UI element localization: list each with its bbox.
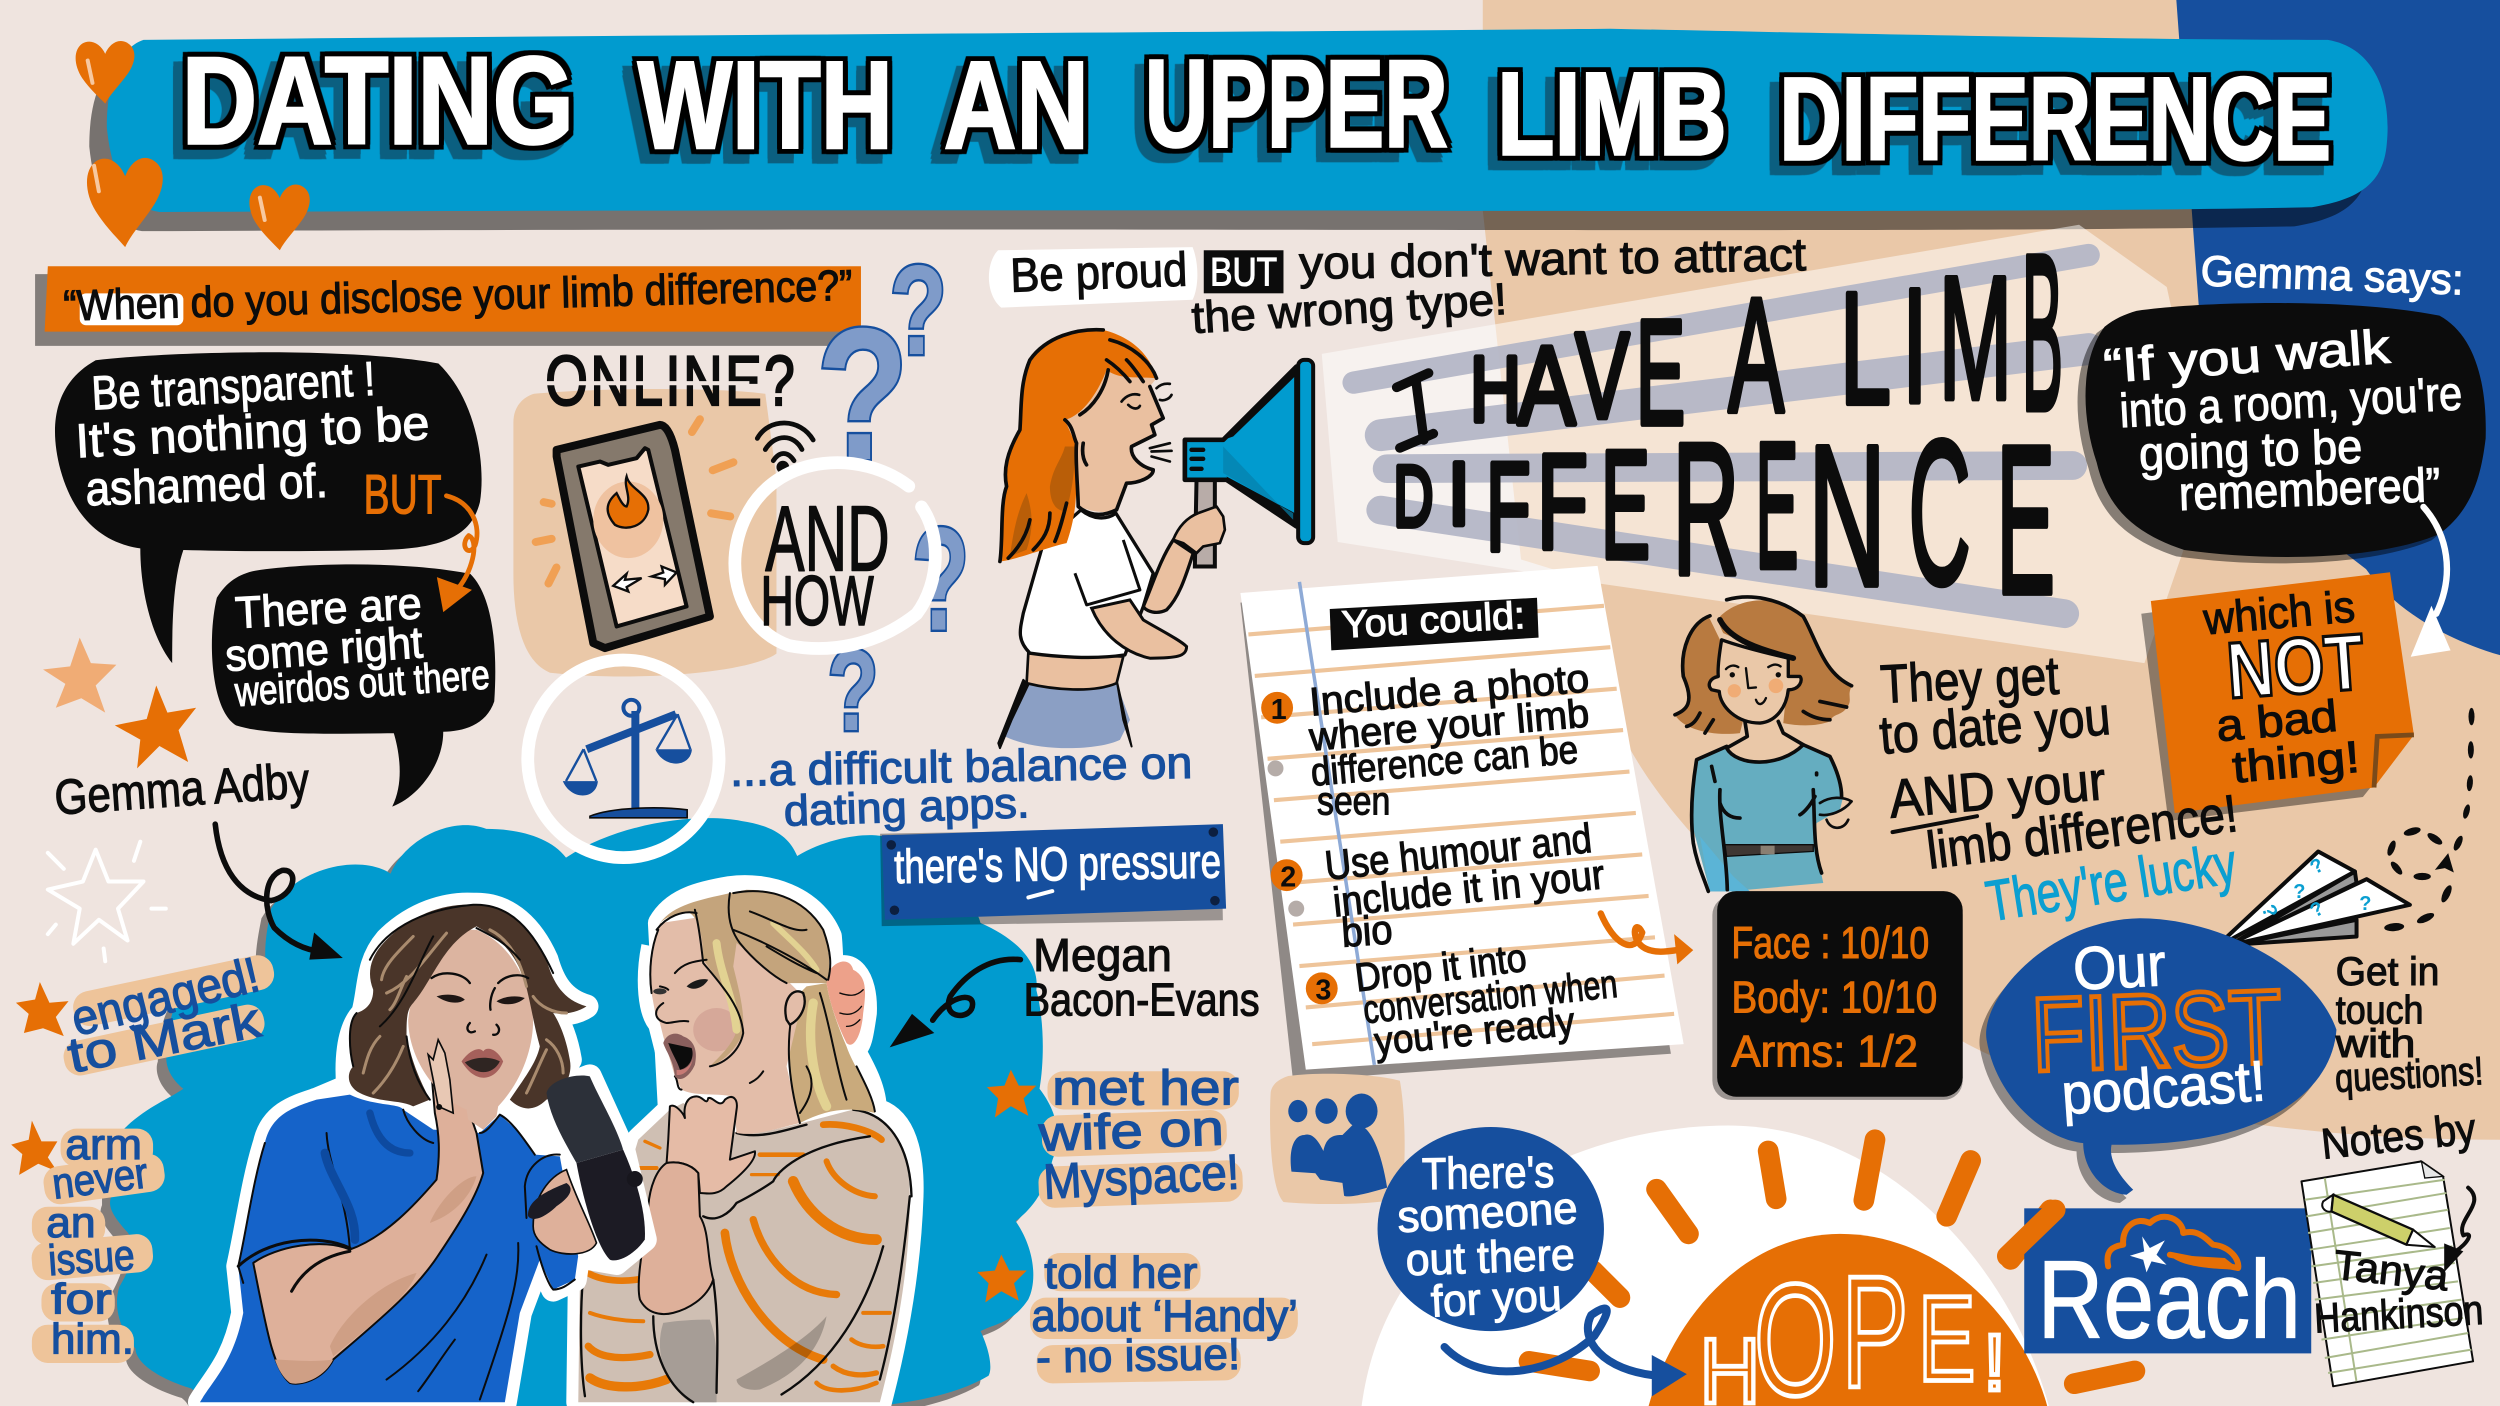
heading: I have a limb bbox=[1397, 209, 2063, 458]
speech bubble: our first podcast: Our bbox=[2071, 930, 2167, 1003]
heading: I have a limb: E bbox=[1636, 288, 1685, 456]
text: be proud bbox=[989, 228, 1807, 343]
list item 3: 3 bbox=[1315, 975, 1331, 1007]
icon: microphone bbox=[546, 1076, 645, 1260]
heading: difference: E bbox=[1601, 418, 1650, 591]
list item 3: conversation when bbox=[1361, 962, 1619, 1032]
circle: someone out there: There's bbox=[1422, 1148, 1555, 1199]
icon: hearts bbox=[76, 41, 310, 250]
hair bbox=[349, 905, 586, 1108]
ear bbox=[785, 991, 805, 1025]
label: Megan Bacon-Evans bbox=[1024, 929, 1260, 1025]
body bbox=[998, 510, 1193, 748]
text: be proud: Be proud bbox=[1009, 244, 1188, 303]
heading: difference: I bbox=[1448, 443, 1470, 543]
heading: I have a limb: L bbox=[1840, 259, 1891, 437]
dress bbox=[1692, 745, 1843, 891]
title: LIMB bbox=[1497, 48, 1727, 180]
arrow: to notepad bbox=[2444, 1188, 2474, 1272]
list item 1 bbox=[1261, 656, 1591, 824]
title: WITH bbox=[638, 36, 893, 175]
dashed flight trail bbox=[2384, 708, 2475, 932]
arrow: white arrow bbox=[2411, 507, 2451, 657]
text: get in touch: Get in bbox=[2336, 950, 2439, 994]
right hair bbox=[789, 983, 875, 1123]
speech bubble: Gemma says: going to be bbox=[2138, 421, 2363, 481]
facial features bbox=[432, 973, 528, 1035]
note: not a bad thing bbox=[2141, 572, 2414, 821]
speech bubble: be transparent: ashamed of. bbox=[85, 455, 329, 516]
heading: I have a limb: A bbox=[1728, 265, 1784, 446]
note: not a bad thing: which is bbox=[2201, 582, 2357, 644]
text: get in touch bbox=[2334, 950, 2484, 1101]
speech bubble: our first podcast bbox=[1979, 918, 2336, 1203]
note: not a bad thing: a bad bbox=[2214, 692, 2339, 751]
handle bbox=[1195, 480, 1215, 566]
icon: wifi bbox=[757, 423, 813, 471]
text: they get to date you bbox=[1877, 646, 2241, 881]
speech bubble: be transparent bbox=[55, 352, 482, 663]
megaphone bbox=[1185, 367, 1296, 526]
list: Gemma facts: to Mark bbox=[63, 992, 265, 1084]
circle: someone out there: out there bbox=[1405, 1230, 1576, 1285]
list item 3 bbox=[1306, 936, 1619, 1064]
head and megaphone bbox=[1000, 329, 1313, 566]
note: not a bad thing: thing! bbox=[2230, 733, 2362, 793]
list: Megan facts: met her bbox=[1052, 1061, 1239, 1116]
speech bubble: our first podcast: FIRST bbox=[2030, 969, 2284, 1094]
list item 1: 1 bbox=[1271, 694, 1287, 726]
icon: stars left bbox=[43, 638, 196, 768]
text: difficult balance: dating apps. bbox=[783, 779, 1030, 836]
heading: difference: F bbox=[1486, 436, 1531, 577]
panel: ratings: Body: 10/10 bbox=[1732, 973, 1937, 1022]
speech bubble: be transparent: BUT bbox=[364, 462, 442, 525]
arrow: orange squiggle bbox=[1601, 913, 1693, 964]
speech bubble: weirdos: some right bbox=[224, 618, 425, 681]
speech bubble: weirdos: There are bbox=[234, 579, 423, 638]
circle: someone out there: for you bbox=[1430, 1271, 1563, 1327]
list item 1: Include a photo bbox=[1308, 656, 1591, 725]
list item 2 bbox=[1271, 814, 1607, 956]
list: Megan facts: Myspace! bbox=[1042, 1145, 1241, 1210]
list item 2: bio bbox=[1340, 905, 1394, 956]
hand bbox=[1173, 506, 1225, 553]
icon: paper plane: ? bbox=[2359, 893, 2371, 915]
heading: I have a limb: A bbox=[1518, 323, 1576, 448]
heading: hope: E bbox=[1918, 1271, 1975, 1406]
list: Gemma facts: never bbox=[50, 1149, 150, 1209]
icon: paper plane bbox=[2215, 708, 2475, 948]
speech bubble: be transparent: It's nothing to be bbox=[74, 397, 431, 468]
heading: hope: ! bbox=[1983, 1318, 2006, 1406]
icon: pencil bbox=[2322, 1195, 2435, 1247]
arrow: to Megan bbox=[890, 959, 1020, 1047]
text: be proud: you don't want to attract bbox=[1299, 228, 1807, 289]
panel: online phone bbox=[513, 342, 813, 676]
icon: question marks: ? bbox=[827, 627, 879, 755]
mouth bbox=[462, 1049, 503, 1078]
front hair bbox=[660, 890, 829, 1066]
heading: difference: N bbox=[1808, 403, 1886, 628]
list: Gemma facts: for bbox=[51, 1276, 112, 1324]
speech bubble: be transparent: Be transparent ! bbox=[90, 353, 376, 421]
list: Megan facts bbox=[977, 1061, 1298, 1384]
speech bubble: Gemma says: remembered” bbox=[2178, 459, 2441, 521]
icon: paper plane: ? bbox=[2257, 902, 2282, 921]
label: Megan Bacon-Evans: Megan bbox=[1033, 929, 1172, 981]
illustration: Megan bbox=[578, 887, 912, 1402]
hair bbox=[1675, 616, 1743, 734]
list item 1: where your limb bbox=[1307, 692, 1591, 760]
speech bubble: Gemma says: Gemma says: bbox=[2200, 247, 2464, 305]
heading: when do you disclose: “When do you disclose your limb difference?” bbox=[63, 262, 853, 330]
illustration: woman in teal dress bbox=[1675, 597, 1852, 891]
title bbox=[182, 31, 2331, 184]
list: Gemma facts: arm bbox=[65, 1121, 142, 1169]
holding hand bbox=[533, 1170, 596, 1254]
illustration: Gemma bbox=[200, 905, 645, 1402]
heading: I have a limb: H bbox=[1470, 337, 1521, 441]
icon: phone bbox=[557, 425, 710, 648]
icon: question marks: ? bbox=[816, 289, 909, 499]
list item 2: Use humour and bbox=[1323, 814, 1594, 889]
heading: hope bbox=[1700, 1243, 2006, 1406]
speech bubble: weirdos: weirdos out there bbox=[233, 650, 491, 715]
list: Gemma facts: an bbox=[46, 1199, 96, 1247]
face and neck bbox=[651, 913, 803, 1134]
panel: I have a limb difference: E bbox=[1996, 401, 2055, 638]
panel: I have a limb difference bbox=[1322, 209, 2208, 663]
title: UPPER bbox=[1145, 35, 1448, 174]
list: Gemma facts: issue bbox=[47, 1231, 136, 1285]
circle: someone out there: someone bbox=[1396, 1184, 1579, 1242]
heading: difference: D bbox=[1393, 449, 1433, 545]
icon: group of people bbox=[1270, 1074, 1405, 1204]
title: DATING bbox=[182, 31, 574, 170]
circle: someone out there bbox=[1378, 1127, 1604, 1331]
arrow: but to weirdos bbox=[437, 496, 477, 612]
sweater bbox=[578, 1103, 910, 1402]
panel: ratings: Arms: 1/2 bbox=[1732, 1027, 1918, 1076]
icon: balance scales bbox=[528, 660, 719, 858]
list item 3: Drop it into bbox=[1353, 936, 1529, 1000]
illustration: woman with megaphone bbox=[998, 329, 1313, 748]
neck bbox=[1727, 721, 1803, 762]
speech bubble: Gemma says bbox=[2078, 247, 2486, 563]
panel: ratings bbox=[1712, 891, 1963, 1100]
list item 2: include it in your bbox=[1331, 850, 1607, 926]
icon: notepad bbox=[2301, 1161, 2484, 1386]
text: they get to date you: to date you bbox=[1877, 686, 2113, 766]
icon: paper plane: ? bbox=[2306, 897, 2328, 922]
callout: and how: HOW bbox=[761, 562, 874, 640]
list: Gemma facts: him. bbox=[51, 1315, 134, 1363]
list item 2: 2 bbox=[1280, 861, 1296, 893]
panel: ratings: Face : 10/10 bbox=[1732, 919, 1929, 968]
heading: difference: R bbox=[1673, 404, 1739, 614]
shirt bbox=[200, 1095, 578, 1402]
panel: I have a limb difference: B bbox=[2022, 209, 2063, 458]
speech bubble: our first podcast: podcast! bbox=[2060, 1049, 2268, 1127]
callout: and how: AND bbox=[765, 487, 890, 591]
facial features bbox=[656, 960, 763, 1090]
heading: difference: F bbox=[1537, 425, 1588, 577]
heading: I have a limb: V bbox=[1575, 308, 1630, 444]
arrow: blue to hope bbox=[1445, 1308, 1687, 1396]
text: they get to date you: limb difference! bbox=[1923, 784, 2241, 881]
text: difficult balance: ...a difficult balance on bbox=[730, 739, 1193, 796]
panel: hope hill bbox=[1362, 1125, 2135, 1406]
list item 1: seen bbox=[1317, 780, 1390, 824]
list: Gemma facts: engaged! bbox=[66, 947, 265, 1047]
text: difficult balance bbox=[730, 739, 1193, 836]
logo: Reach: Reach bbox=[2038, 1238, 2301, 1361]
heading: difference: C bbox=[1908, 397, 1971, 627]
icon: white star bbox=[48, 842, 166, 961]
callout: and how bbox=[735, 463, 935, 648]
icon: paper plane: ? bbox=[2293, 881, 2305, 903]
speech bubble: weirdos bbox=[212, 564, 495, 807]
panel: online phone: ONLINE? bbox=[545, 342, 797, 420]
hand detail bbox=[428, 1040, 453, 1113]
arrow: to Gemma bbox=[215, 824, 343, 960]
heading: I have a limb: I bbox=[1902, 256, 1928, 437]
banner: no pressure: there's NO pressure bbox=[894, 835, 1221, 894]
panel: you could list paper bbox=[1240, 566, 1684, 1081]
panel: cloud backdrop bbox=[100, 818, 1057, 1406]
heading: I have a limb: M bbox=[1939, 241, 2012, 437]
list item 3: you're ready bbox=[1372, 999, 1577, 1064]
text: be proud: the wrong type! bbox=[1190, 275, 1508, 343]
mouth bbox=[663, 1034, 696, 1079]
icon: question marks: ? bbox=[912, 498, 969, 662]
label: Megan Bacon-Evans: Bacon-Evans bbox=[1024, 973, 1260, 1025]
list item 1: difference can be bbox=[1309, 728, 1580, 795]
scrunchie bbox=[827, 962, 865, 1045]
text: they get to date you: They get bbox=[1879, 646, 2060, 715]
icon: paper plane: ? bbox=[2306, 854, 2328, 879]
icon: notepad: Tanya bbox=[2332, 1241, 2452, 1300]
logo: Reach bbox=[2007, 1208, 2311, 1361]
label: Gemma Adby: Gemma Adby bbox=[53, 753, 311, 826]
heading: difference: E bbox=[1755, 406, 1798, 606]
list: Megan facts: wife on bbox=[1037, 1101, 1225, 1162]
hand and arm bbox=[667, 1096, 755, 1193]
face bbox=[1709, 640, 1801, 723]
heading: difference bbox=[1393, 397, 2055, 638]
list: Megan facts: told her bbox=[1044, 1249, 1198, 1298]
title: AN bbox=[944, 36, 1089, 175]
text: they're lucky: They're lucky bbox=[1982, 832, 2241, 934]
text: get in touch: with bbox=[2335, 1022, 2415, 1066]
speech bubble: Gemma says: “If you walk bbox=[2102, 321, 2392, 394]
text: be proud: BUT bbox=[1210, 250, 1277, 294]
icon: question marks: ? bbox=[890, 240, 947, 382]
list: Megan facts: - no issue! bbox=[1036, 1330, 1241, 1383]
heading: you could: You could: bbox=[1341, 594, 1526, 647]
panel: title banner bbox=[89, 29, 2388, 231]
note: not a bad thing: NOT bbox=[2224, 617, 2367, 715]
arm bbox=[253, 1040, 483, 1384]
icon: question marks bbox=[816, 240, 969, 755]
text: get in touch: touch bbox=[2336, 988, 2423, 1032]
list: Megan facts: about ‘Handy’ bbox=[1032, 1292, 1298, 1341]
text: they get to date you: AND your bbox=[1887, 751, 2108, 830]
list: Gemma facts bbox=[11, 947, 277, 1363]
text: notes by: Notes by bbox=[2319, 1105, 2478, 1169]
face bbox=[408, 930, 533, 1130]
banner: no pressure bbox=[880, 824, 1226, 926]
